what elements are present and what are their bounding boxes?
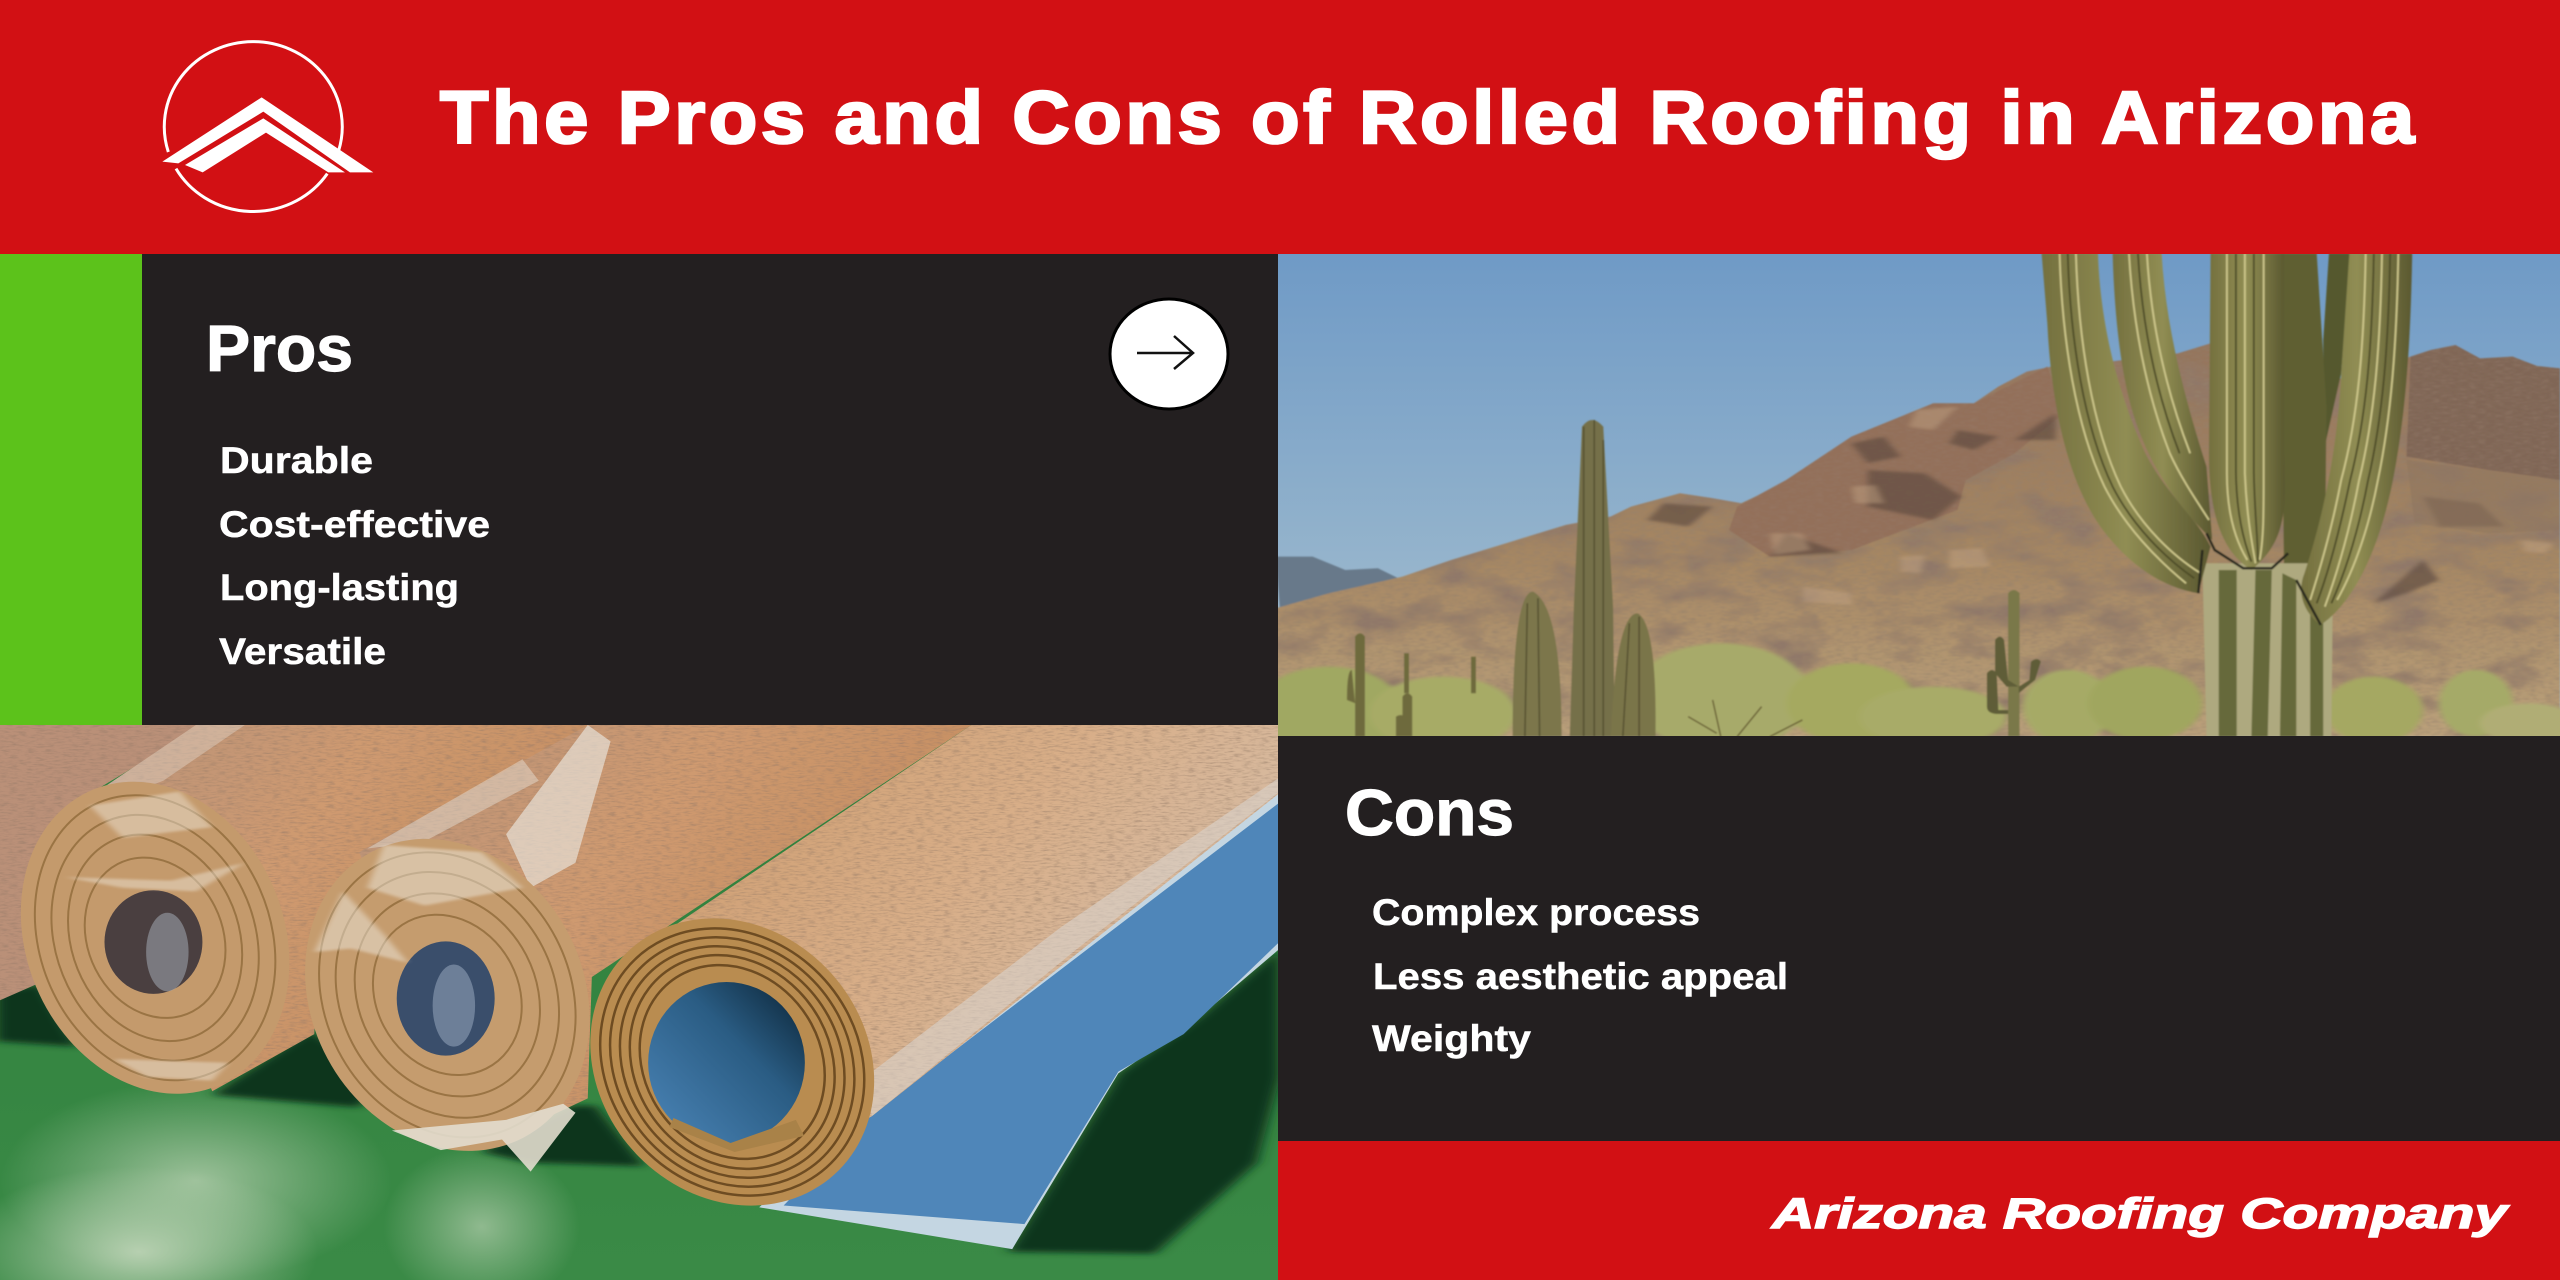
- roll shadows: [0, 948, 1280, 1254]
- plastic wrap tail: [392, 1104, 575, 1172]
- roll one: [90, 725, 596, 1091]
- back roll: [0, 725, 204, 1002]
- pros list: Long-lasting: [220, 567, 459, 608]
- cons list: [1372, 892, 1788, 1059]
- icon: roof logo: [162, 42, 373, 211]
- pros list: Versatile: [219, 631, 386, 672]
- panel: pros: [142, 254, 1278, 725]
- small cactus group: [1347, 420, 2041, 737]
- heading: cons: Cons: [1345, 776, 1514, 849]
- photo: saguaro desert: [1256, 253, 2560, 753]
- panel: green accent bar: [0, 254, 142, 725]
- floor glare: [0, 1081, 580, 1280]
- pros list: [219, 440, 490, 672]
- big saguaro: [2042, 253, 2412, 737]
- cons list: Complex process: [1372, 892, 1700, 933]
- icon: arrow button: [1110, 299, 1228, 409]
- title: The Pros and Cons of Rolled Roofing in Arizona: [440, 77, 2416, 159]
- heading: pros: Pros: [206, 312, 353, 385]
- pros list: Durable: [220, 440, 373, 481]
- cons list: Weighty: [1372, 1018, 1531, 1059]
- photo: rolled roofing: [0, 720, 1286, 1280]
- roll two: [359, 725, 971, 1148]
- footer band: [1278, 1141, 2560, 1280]
- pros list: Cost-effective: [219, 504, 490, 545]
- roll three: [678, 725, 1282, 1148]
- blue underlayment sheet: [759, 791, 1280, 1249]
- cons list: Less aesthetic appeal: [1373, 956, 1788, 997]
- panel: cons: [1278, 736, 2560, 1141]
- header band: [0, 0, 2560, 254]
- company name: Arizona Roofing Company: [1771, 1190, 2510, 1238]
